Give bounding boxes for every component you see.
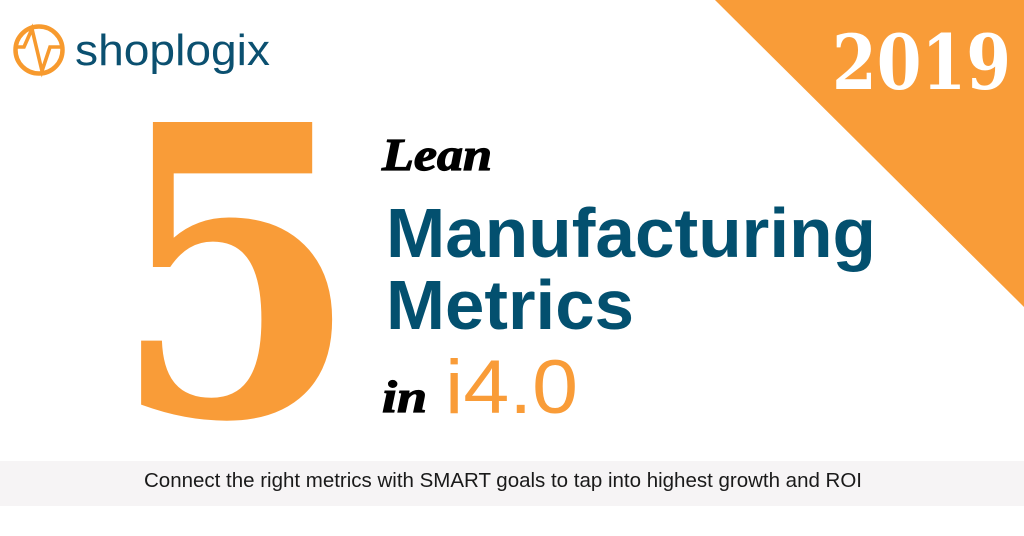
title accent: i4.0: i4.0: [445, 345, 578, 430]
title: Metrics: Metrics: [386, 266, 634, 344]
title: Manufacturing: Manufacturing: [386, 194, 876, 272]
logo: shoplogix: [15, 26, 270, 75]
logo wordmark: shoplogix: [75, 26, 270, 75]
tagline text: Connect the right metrics with SMART goals to tap into highest growth and ROI: [144, 470, 862, 492]
large numeral 5: 5: [112, 38, 359, 510]
corner triangle with year: [715, 0, 1024, 307]
title word: Lean: Lean: [381, 129, 492, 180]
icon: pulse circle: [15, 26, 63, 74]
tagline banner: [0, 461, 1024, 506]
title word: in: in: [382, 371, 427, 422]
